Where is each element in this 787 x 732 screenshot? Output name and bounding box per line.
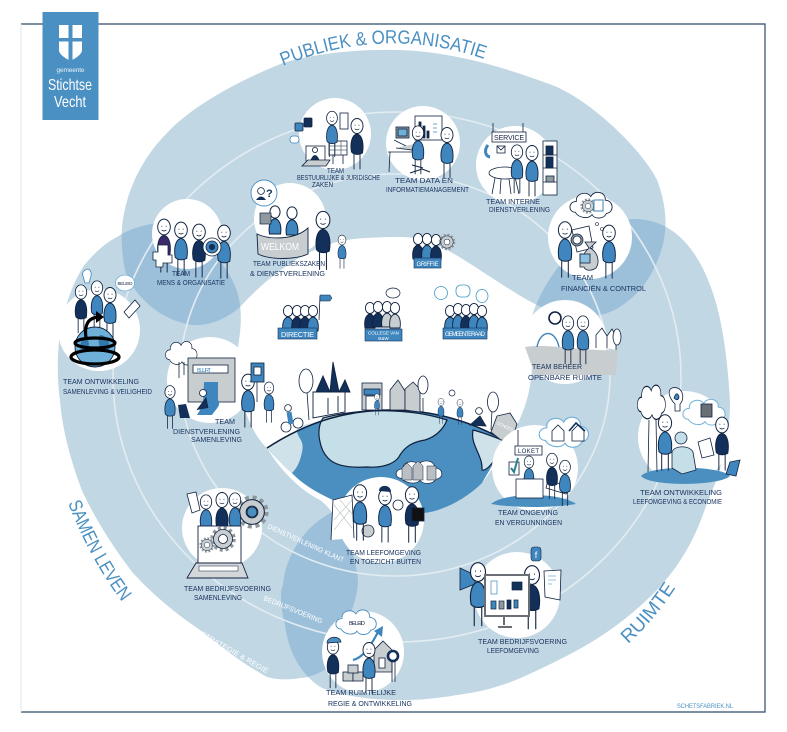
icon: buurt building: BUURT <box>197 368 212 374</box>
gemeenteraad board: GEMEENTERAAD <box>445 332 486 338</box>
label: TEAM RUIMTELIJKE <box>326 688 396 697</box>
icon: figures on the hill <box>374 390 463 424</box>
label: TEAM <box>572 273 593 282</box>
icon: table and cabinet <box>489 141 557 195</box>
icon: speech bubbles <box>434 285 488 302</box>
icon: megaphone <box>460 568 475 590</box>
college board: B&W <box>378 336 389 341</box>
icon: school: SCHOOL <box>496 420 515 433</box>
panel: team data en informatiemanagement <box>386 106 469 194</box>
icon: puzzle piece and target <box>153 238 221 267</box>
label: TEAM <box>172 269 190 278</box>
icon: cloud with houses <box>396 461 442 483</box>
icon: bicycle rider <box>281 405 303 432</box>
label: TEAM ONGEVING <box>498 508 558 517</box>
overlap: publiek and samen leven <box>122 224 240 326</box>
icon: sign post <box>251 363 264 402</box>
panel: team ruimtelijke regie & ontwikkeling <box>322 610 412 708</box>
people <box>165 374 274 429</box>
panel: team dienstverlening samenleving <box>165 337 274 444</box>
label: TEAM ONTWIKKELING <box>63 377 139 386</box>
people <box>353 485 419 542</box>
panel: team financien & control <box>548 192 646 293</box>
label: DIENSTVERLENING <box>489 205 550 214</box>
label <box>528 362 602 382</box>
icon: magnifier and board <box>393 500 424 521</box>
label <box>157 269 225 287</box>
college board <box>365 329 402 341</box>
label: SAMENLEVING & VEILIGHEID <box>63 387 152 396</box>
ring lines <box>113 112 681 642</box>
label: TEAM LEEFOMGEVING <box>346 548 421 557</box>
panel: globe and village <box>267 362 517 515</box>
group: gemeenteraad <box>434 285 488 339</box>
icon: social media and shopping cart <box>290 113 348 166</box>
label <box>633 488 722 506</box>
people <box>558 222 615 278</box>
ring label: dienstverlening klant: DIENSTVERLENING KLANT <box>266 523 345 565</box>
band: samen leven <box>58 223 358 679</box>
panel: team beheer openbare ruimte <box>523 300 621 384</box>
label: SAMENLEVING <box>191 435 242 444</box>
label: FINANCIËN & CONTROL <box>561 284 646 293</box>
icon: shop <box>362 383 382 410</box>
label <box>561 273 646 293</box>
icon: ground and desk <box>491 456 576 507</box>
group: college van b&w <box>365 288 402 341</box>
icon: beleid bubble: BELEID <box>118 281 133 286</box>
label: INFORMATIEMANAGEMENT <box>386 185 469 194</box>
icon: screen with stand <box>485 575 529 627</box>
logo: gemeente stichtse vecht: Vecht <box>54 94 86 111</box>
panel: team ontwikkeling samenleving & veiligheid <box>58 269 152 396</box>
icon: bench and tree <box>470 392 498 430</box>
icon: tree left <box>299 369 313 420</box>
customers <box>316 211 346 269</box>
globe <box>267 410 507 515</box>
label: & DIENSTVERLENING <box>250 269 325 278</box>
ring label: strategie & regie: STRATEGIE & REGIE <box>199 631 269 675</box>
icon: service sign, phone and mail: SERVICE <box>494 135 524 142</box>
panel: team bedrijfsvoering leefomgeving <box>460 547 567 655</box>
overlap: publiek and ruimte <box>536 219 666 316</box>
icon: facebook badge: f <box>535 550 538 560</box>
label <box>486 197 550 214</box>
icon: document <box>124 300 140 318</box>
icon: loket sign and cloud: LOKET <box>518 449 539 455</box>
icon: question bubble: ? <box>266 188 273 200</box>
people <box>410 126 453 178</box>
people <box>327 637 375 693</box>
heading: ruimte: RUIMTE <box>620 581 676 643</box>
label: EN TOEZICHT BUITEN <box>350 557 421 566</box>
label <box>386 176 469 194</box>
icon: school <box>491 413 517 440</box>
panel: team mens & organisatie <box>152 199 230 287</box>
icon: document and money bag <box>571 226 598 270</box>
label: OPENBARE RUIMTE <box>528 373 602 382</box>
people <box>470 563 540 629</box>
label: TEAM INTERNE <box>486 197 540 206</box>
people <box>327 111 363 169</box>
people <box>547 453 570 506</box>
label <box>173 417 242 444</box>
icon: chart board and computer <box>388 116 442 172</box>
label <box>495 508 562 527</box>
ring label: bedrijfsvoering: BEDRIJFSVOERING <box>262 595 323 625</box>
overlap: ruimte and samen leven <box>281 512 358 677</box>
label: TEAM DATA EN <box>395 176 453 185</box>
panel: team publiekszaken & dienstverlening <box>250 180 346 278</box>
icon: beleid cloud: BELEID <box>349 621 365 627</box>
griffie board: GRIFFIE <box>416 262 438 268</box>
credit: SCHETSFABRIEK.NL <box>677 703 733 710</box>
label <box>346 548 421 566</box>
panel: team leefomgeving en toezicht buiten <box>331 477 424 566</box>
icon: ground, bridge and houses <box>525 312 621 375</box>
heading: publiek & organisatie: PUBLIEK & ORGANISATIE <box>280 30 488 66</box>
panel: team bedrijfsvoering samenleving <box>182 488 271 602</box>
label: TEAM BEDRIJFSVOERING <box>184 584 271 593</box>
icon: ground with tree, bulb and cloud <box>637 385 740 484</box>
heading: samen leven: SAMEN LEVEN <box>69 500 132 601</box>
directie board: DIRECTIE <box>281 330 314 339</box>
icon: thought bubble <box>386 288 400 298</box>
label: EN VERGUNNINGEN <box>495 518 562 527</box>
label: TEAM ONTWIKKELING <box>640 488 722 497</box>
label: TEAM BEDRIJFSVOERING <box>478 637 567 646</box>
icon: idea bulb <box>83 269 91 283</box>
band: publiek & organisatie <box>122 50 666 325</box>
label <box>184 584 271 602</box>
label: ZAKEN <box>312 180 333 189</box>
panel: team bestuurlijke & juridische zaken <box>290 98 380 189</box>
label: TEAM BEHEER <box>532 362 582 371</box>
label <box>478 637 567 655</box>
icon: welkom desk: WELKOM <box>261 242 299 253</box>
people <box>158 219 230 278</box>
people <box>511 145 538 196</box>
people <box>562 316 589 364</box>
logo: gemeente stichtse vecht: gemeente <box>56 67 85 74</box>
group: directie <box>278 295 332 339</box>
label <box>250 259 325 278</box>
icon: shield <box>59 25 82 61</box>
label: DIENSTVERLENING <box>173 427 240 436</box>
icon: laptop with gears <box>187 526 248 578</box>
label <box>326 688 412 708</box>
icon: goal and bush <box>331 495 374 540</box>
people <box>658 415 728 470</box>
logo: gemeente stichtse vecht <box>42 12 98 120</box>
icon: gear <box>440 235 454 249</box>
label: REGIE & ONTWIKKELING <box>328 699 412 708</box>
college board: COLLEGE VAN <box>368 330 399 336</box>
people <box>75 281 116 338</box>
icon: flag <box>319 295 332 320</box>
panel: team ontwikkeling leefomgeving & economie <box>633 385 740 506</box>
panel: team interne dienstverlening <box>476 123 557 214</box>
people <box>200 492 241 543</box>
people behind desk <box>260 206 298 235</box>
label <box>297 166 380 189</box>
band: ruimte <box>281 219 730 700</box>
icon: tree cloud <box>165 341 197 365</box>
group: griffie <box>413 233 454 268</box>
icon: village church <box>313 362 350 418</box>
icon: document <box>544 570 561 600</box>
label: MENS & ORGANISATIE <box>157 278 225 287</box>
label: TEAM <box>327 166 344 175</box>
label: SAMENLEVING <box>194 593 242 602</box>
logo: gemeente stichtse vecht: Stichtse <box>48 77 92 94</box>
label: TEAM <box>215 417 235 426</box>
label: LEEFOMGEVING & ECONOMIE <box>633 497 722 506</box>
label: TEAM PUBLIEKSZAKEN <box>253 259 325 268</box>
panel: team omgeving en vergunningen <box>491 417 588 527</box>
icon: houses <box>390 376 428 412</box>
label: BESTUURLIJKE & JURIDISCHE <box>297 173 380 182</box>
icon: thought cloud with gear <box>570 192 612 230</box>
label: LEEFOMGEVING <box>487 646 539 655</box>
icon: arrow, house and key <box>343 626 398 682</box>
icon: globe with spiral arrow <box>71 311 119 367</box>
icon: document and gear <box>187 492 266 526</box>
label <box>63 377 152 396</box>
